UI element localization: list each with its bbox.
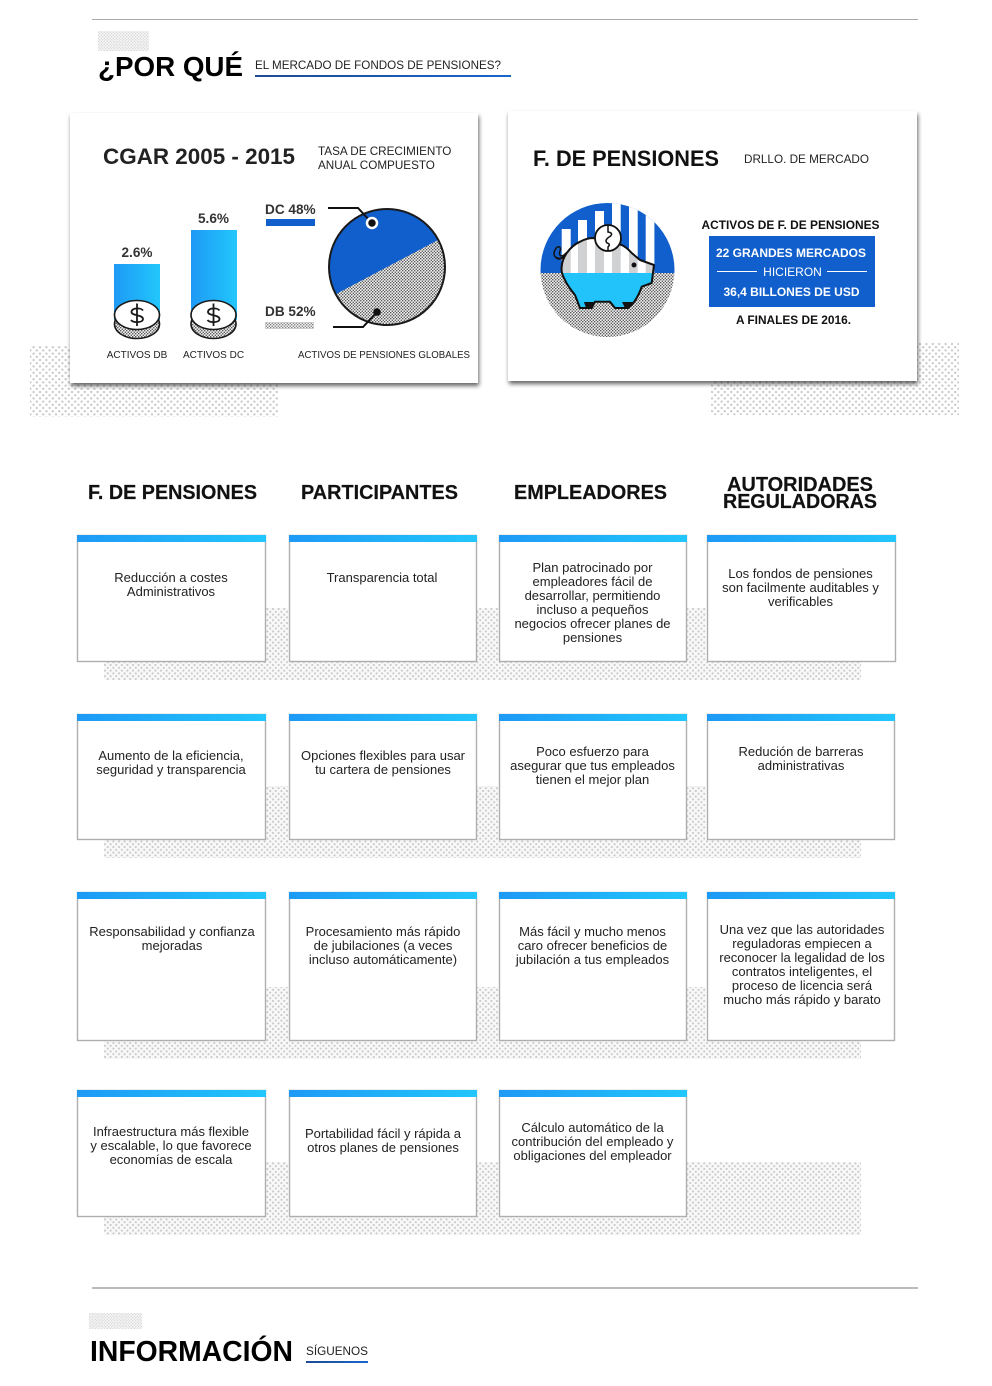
card: plan patrocinado: Plan patrocinado por — [533, 560, 653, 575]
blue callout: 22 GRANDES MERCADOS — [716, 246, 866, 260]
card: transparencia total — [289, 535, 477, 662]
card: reducción a costes: Reducción a costes — [114, 570, 228, 585]
card: opciones flexibles: tu cartera de pensiones — [315, 762, 451, 777]
heading: autoridades reguladoras: AUTORIDADES — [727, 474, 873, 496]
card: cálculo automático: obligaciones del empleador — [513, 1148, 672, 1163]
card: procesamiento: de jubilaciones (a veces — [314, 938, 453, 953]
card: portabilidad — [289, 1090, 477, 1216]
footer subtitle: SÍGUENOS — [306, 1345, 368, 1358]
CAGR subtitle: TASA DE CRECIMIENTO — [318, 145, 451, 158]
blue callout: HICIERON — [763, 265, 822, 279]
card: plan patrocinado: desarrollar, permitiendo — [525, 588, 660, 603]
pie chart — [328, 208, 445, 327]
panel title: F. DE PENSIONES — [533, 146, 719, 171]
bottom rule — [92, 1287, 918, 1289]
card: más fácil — [499, 892, 687, 1040]
card: más fácil: caro ofrecer beneficios de — [518, 938, 667, 953]
card background — [70, 113, 478, 383]
card: procesamiento — [289, 892, 477, 1040]
card: plan patrocinado — [499, 535, 687, 662]
card: reducción a costes — [77, 535, 266, 662]
card: responsabilidad: Responsabilidad y confianza — [89, 924, 256, 939]
card: poco esfuerzo: tienen el mejor plan — [536, 772, 649, 787]
subtitle: EL MERCADO DE FONDOS DE PENSIONES? — [255, 59, 501, 72]
card: portabilidad: otros planes de pensiones — [307, 1140, 459, 1155]
card: infraestructura: Infraestructura más flexible — [93, 1124, 249, 1139]
background pattern: left card — [30, 345, 278, 417]
card: redución de barreras: Redución de barreras — [738, 744, 864, 759]
card: responsabilidad: mejoradas — [142, 938, 203, 953]
legend: DB 52%: DB 52% — [265, 304, 316, 319]
pie caption: ACTIVOS DE PENSIONES GLOBALES — [298, 350, 470, 361]
card background — [508, 111, 917, 381]
card: infraestructura: economías de escala — [110, 1152, 233, 1167]
bar: activos DC: ACTIVOS DC — [183, 350, 244, 361]
heading: participantes: PARTICIPANTES — [301, 482, 458, 504]
card: opciones flexibles — [289, 714, 477, 840]
card: más fácil: jubilación a tus empleados — [515, 952, 670, 967]
card: poco esfuerzo: Poco esfuerzo para — [536, 744, 650, 759]
row 3 pattern — [104, 987, 861, 1059]
legend: DB 52% — [265, 304, 316, 329]
card: contratos inteligentes: contratos inteligentes, el — [732, 964, 872, 979]
row 1 pattern — [104, 608, 861, 680]
icon: piggy bank — [540, 203, 675, 338]
footer underline — [306, 1361, 368, 1363]
card: transparencia total: Transparencia total — [327, 570, 438, 585]
heading: autoridades reguladoras — [723, 474, 877, 513]
CAGR title: CGAR 2005 - 2015 — [103, 144, 295, 169]
legend: DC 48% — [265, 202, 316, 226]
bar: activos DB: 2.6% — [122, 245, 152, 260]
heading: empleadores: EMPLEADORES — [514, 482, 667, 504]
top rule — [92, 19, 918, 20]
card: plan patrocinado: negocios ofrecer planes de — [514, 616, 671, 631]
card: aumento de la eficiencia — [77, 714, 266, 840]
card: redución de barreras: administrativas — [758, 758, 845, 773]
card: procesamiento: Procesamiento más rápido — [306, 924, 460, 939]
card: fondos auditables: son facilmente auditables y — [722, 580, 879, 595]
card: procesamiento: incluso automáticamente) — [309, 952, 457, 967]
main title: ¿POR QUÉ — [98, 51, 243, 82]
footer title: INFORMACIÓN — [90, 1335, 293, 1367]
card: plan patrocinado: pensiones — [563, 630, 623, 645]
heading: F. de pensiones: F. DE PENSIONES — [88, 482, 257, 504]
card: aumento de la eficiencia: Aumento de la eficiencia, — [98, 748, 244, 763]
card: responsabilidad — [77, 892, 266, 1040]
card: opciones flexibles: Opciones flexibles para usar — [301, 748, 466, 763]
card: cálculo automático — [499, 1090, 687, 1216]
panel subtitle: DRLLO. DE MERCADO — [744, 153, 869, 166]
row 2 pattern — [104, 786, 861, 858]
CAGR subtitle: ANUAL COMPUESTO — [318, 159, 435, 172]
card: contratos inteligentes — [707, 892, 895, 1040]
date note: A FINALES DE 2016. — [736, 313, 851, 327]
card: contratos inteligentes: mucho más rápido y barato — [723, 992, 881, 1007]
bar: activos DC — [183, 211, 244, 361]
card: plan patrocinado: incluso a pequeños — [536, 602, 649, 617]
card: contratos inteligentes: Una vez que las autoridades — [720, 922, 885, 937]
assets heading: ACTIVOS DE F. DE PENSIONES — [702, 218, 880, 232]
card: más fácil: Más fácil y mucho menos — [519, 924, 666, 939]
card: portabilidad: Portabilidad fácil y rápida a — [305, 1126, 462, 1141]
panel: CAGR — [70, 113, 478, 383]
card: plan patrocinado: empleadores fácil de — [533, 574, 652, 589]
footer: información — [89, 1313, 368, 1367]
background pattern: right card — [711, 343, 959, 415]
row 4 pattern — [104, 1162, 861, 1235]
card: fondos auditables — [707, 535, 896, 662]
card: contratos inteligentes: reconocer la legalidad de los — [719, 950, 885, 965]
card: contratos inteligentes: proceso de licencia será — [732, 978, 873, 993]
card: cálculo automático: Cálculo automático de la — [521, 1120, 664, 1135]
blue callout — [709, 236, 875, 307]
bar: activos DB — [107, 245, 168, 361]
bar: activos DC: 5.6% — [198, 211, 229, 226]
header: por qué — [98, 31, 511, 82]
card: aumento de la eficiencia: seguridad y transparencia — [96, 762, 247, 777]
subtitle underline — [255, 75, 511, 77]
card: poco esfuerzo — [499, 714, 687, 840]
card: fondos auditables: Los fondos de pensiones — [728, 566, 873, 581]
heading: autoridades reguladoras: REGULADORAS — [723, 491, 877, 513]
card: infraestructura: y escalable, lo que favorece — [90, 1138, 252, 1153]
legend: DC 48%: DC 48% — [265, 202, 316, 217]
card: redución de barreras — [707, 714, 895, 840]
card: poco esfuerzo: asegurar que tus empleados — [510, 758, 675, 773]
column headings — [88, 474, 877, 513]
footer pattern patch — [89, 1313, 142, 1329]
card: reducción a costes: Administrativos — [127, 584, 216, 599]
header pattern patch — [98, 31, 149, 51]
card: cálculo automático: contribución del empleado y — [512, 1134, 674, 1149]
bar: activos DB: ACTIVOS DB — [107, 350, 168, 361]
card: fondos auditables: verificables — [768, 594, 834, 609]
panel: F. de pensiones — [508, 111, 917, 381]
blue callout: 36,4 BILLONES DE USD — [724, 285, 860, 299]
card: infraestructura — [77, 1090, 266, 1216]
card: contratos inteligentes: reguladoras empiecen a — [732, 936, 873, 951]
